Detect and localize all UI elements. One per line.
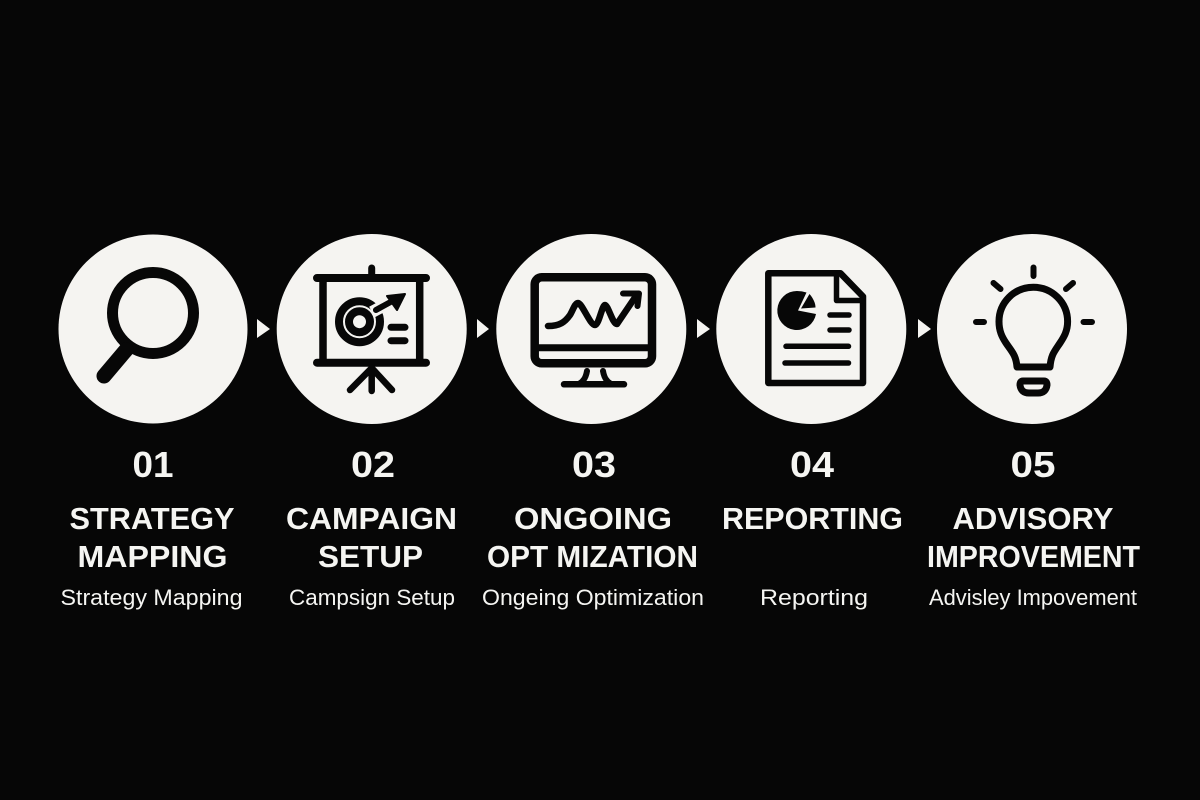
title: advisory improvement bbox=[927, 501, 1140, 574]
title: advisory improvement: ADVISORY bbox=[952, 501, 1114, 536]
title: ongoing optimization: OPT MIZATION bbox=[487, 539, 698, 574]
title: ongoing optimization: ONGOING bbox=[514, 501, 672, 536]
icon circle 1 bbox=[58, 234, 248, 424]
title: reporting: REPORTING bbox=[722, 501, 903, 536]
subtitle 2: Campsign Setup bbox=[289, 585, 455, 610]
number 03: 03 bbox=[572, 444, 616, 485]
icon: presentation board with target bbox=[317, 268, 426, 391]
title: campaign setup: CAMPAIGN bbox=[286, 501, 457, 536]
subtitle 1: Strategy Mapping bbox=[60, 585, 242, 610]
arrow 2 bbox=[477, 319, 489, 338]
step 5: advisory improvement bbox=[927, 234, 1140, 610]
title: ongoing optimization bbox=[487, 501, 698, 574]
icon circle 3 bbox=[496, 234, 686, 424]
step 1: strategy mapping bbox=[58, 234, 248, 610]
number 04: 04 bbox=[790, 444, 834, 485]
title: campaign setup bbox=[286, 501, 457, 574]
icon: monitor with rising chart bbox=[535, 277, 652, 384]
number 02: 02 bbox=[351, 444, 395, 485]
icon: report document with pie chart bbox=[768, 273, 863, 383]
title: campaign setup: SETUP bbox=[318, 539, 423, 574]
icon circle 4 bbox=[716, 234, 906, 424]
icon circle 5 bbox=[937, 234, 1127, 424]
number 05: 05 bbox=[1010, 444, 1056, 485]
title: strategy mapping: MAPPING bbox=[78, 539, 228, 574]
number 01: 01 bbox=[132, 444, 174, 485]
arrow 1 bbox=[257, 319, 270, 338]
arrow 4 bbox=[918, 319, 931, 338]
icon: light bulb bbox=[976, 268, 1092, 393]
title: advisory improvement: IMPROVEMENT bbox=[927, 539, 1140, 574]
subtitle 4: Reporting bbox=[760, 585, 868, 610]
title: strategy mapping bbox=[70, 501, 235, 574]
subtitle 5: Advisley Impovement bbox=[929, 585, 1137, 610]
icon circle 2 bbox=[277, 234, 467, 424]
step 4: reporting bbox=[716, 234, 906, 610]
subtitle 3: Ongeing Optimization bbox=[482, 585, 704, 610]
step 3: ongoing optimization bbox=[482, 234, 704, 610]
step 2: campaign setup bbox=[277, 234, 467, 610]
icon: magnifying glass bbox=[104, 272, 194, 376]
title: strategy mapping: STRATEGY bbox=[70, 501, 235, 536]
arrow 3 bbox=[697, 319, 710, 338]
